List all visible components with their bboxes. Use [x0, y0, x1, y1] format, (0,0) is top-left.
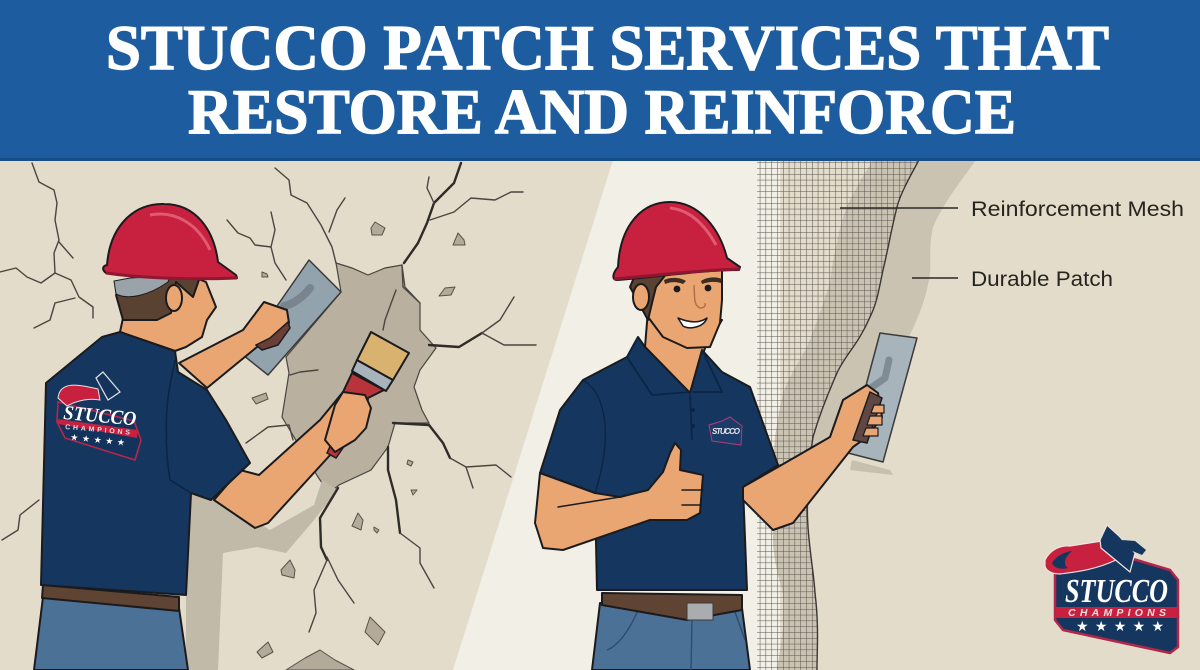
right worker: [535, 202, 884, 670]
trowel held against wall: [243, 260, 341, 375]
trowel grip: [256, 322, 290, 350]
trowel arm: [743, 385, 882, 530]
back logo: ★★★★★: [70, 433, 125, 449]
thumbs-up arm: [535, 443, 703, 550]
wall background: [0, 160, 1200, 670]
reinforcement mesh: [757, 160, 922, 670]
wall cracks: [0, 163, 536, 632]
paint brush: [327, 332, 409, 458]
logo: Stucco Champions badge: ★★★★★: [1076, 619, 1164, 635]
left worker: [34, 204, 409, 670]
logo: Stucco Champions badge: STUCCO: [1065, 573, 1168, 610]
right trowel shadow: [850, 460, 893, 475]
gripping hand over brush: [325, 392, 371, 452]
polo shirt: [540, 337, 778, 590]
header banner: [0, 0, 1200, 161]
belt: [42, 585, 179, 611]
title: [106, 12, 1109, 147]
logo: Stucco Champions badge: [1045, 525, 1178, 653]
lower arm reaching to brush: [214, 392, 368, 528]
ear: [633, 284, 649, 310]
worker shadow on wall: [186, 470, 338, 670]
chest logo: [709, 417, 742, 445]
eyes: [674, 285, 711, 292]
neck and face: [120, 270, 216, 351]
eyebrows: [664, 277, 722, 284]
cap band: [114, 276, 170, 297]
title: STUCCO PATCH SERVICES THAT: [106, 12, 1109, 83]
trowel grip: [853, 392, 882, 443]
right trowel: [848, 333, 917, 462]
jeans: [592, 603, 750, 670]
back logo: STUCCO: [63, 402, 137, 430]
arm and finger creases: [558, 490, 703, 507]
hair: [630, 273, 667, 320]
upper arm reaching to trowel: [179, 302, 289, 388]
durable patch band: [773, 160, 976, 670]
face: [647, 270, 722, 348]
hair: [116, 272, 200, 320]
nose: [694, 285, 705, 308]
fingers: [863, 405, 884, 436]
hard hat: [613, 202, 740, 280]
jeans: [34, 597, 188, 670]
logo: Stucco Champions badge: CHAMPIONS: [1068, 607, 1166, 619]
back logo: [57, 372, 141, 460]
neck: [645, 310, 722, 393]
smile: [678, 318, 707, 328]
hard hat: [103, 204, 237, 279]
belt: [602, 593, 742, 620]
polo shirt: [41, 332, 250, 595]
back logo: CHAMPIONS: [65, 424, 131, 437]
title: RESTORE AND REINFORCE: [188, 76, 1016, 147]
exposed damaged stucco: [282, 263, 436, 493]
callout: durable patch: Durable Patch: [971, 267, 1113, 291]
callout: reinforcement mesh: Reinforcement Mesh: [971, 197, 1184, 221]
rubble chips: [252, 222, 465, 670]
ear: [166, 285, 182, 311]
chest logo: STUCCO: [712, 427, 741, 436]
